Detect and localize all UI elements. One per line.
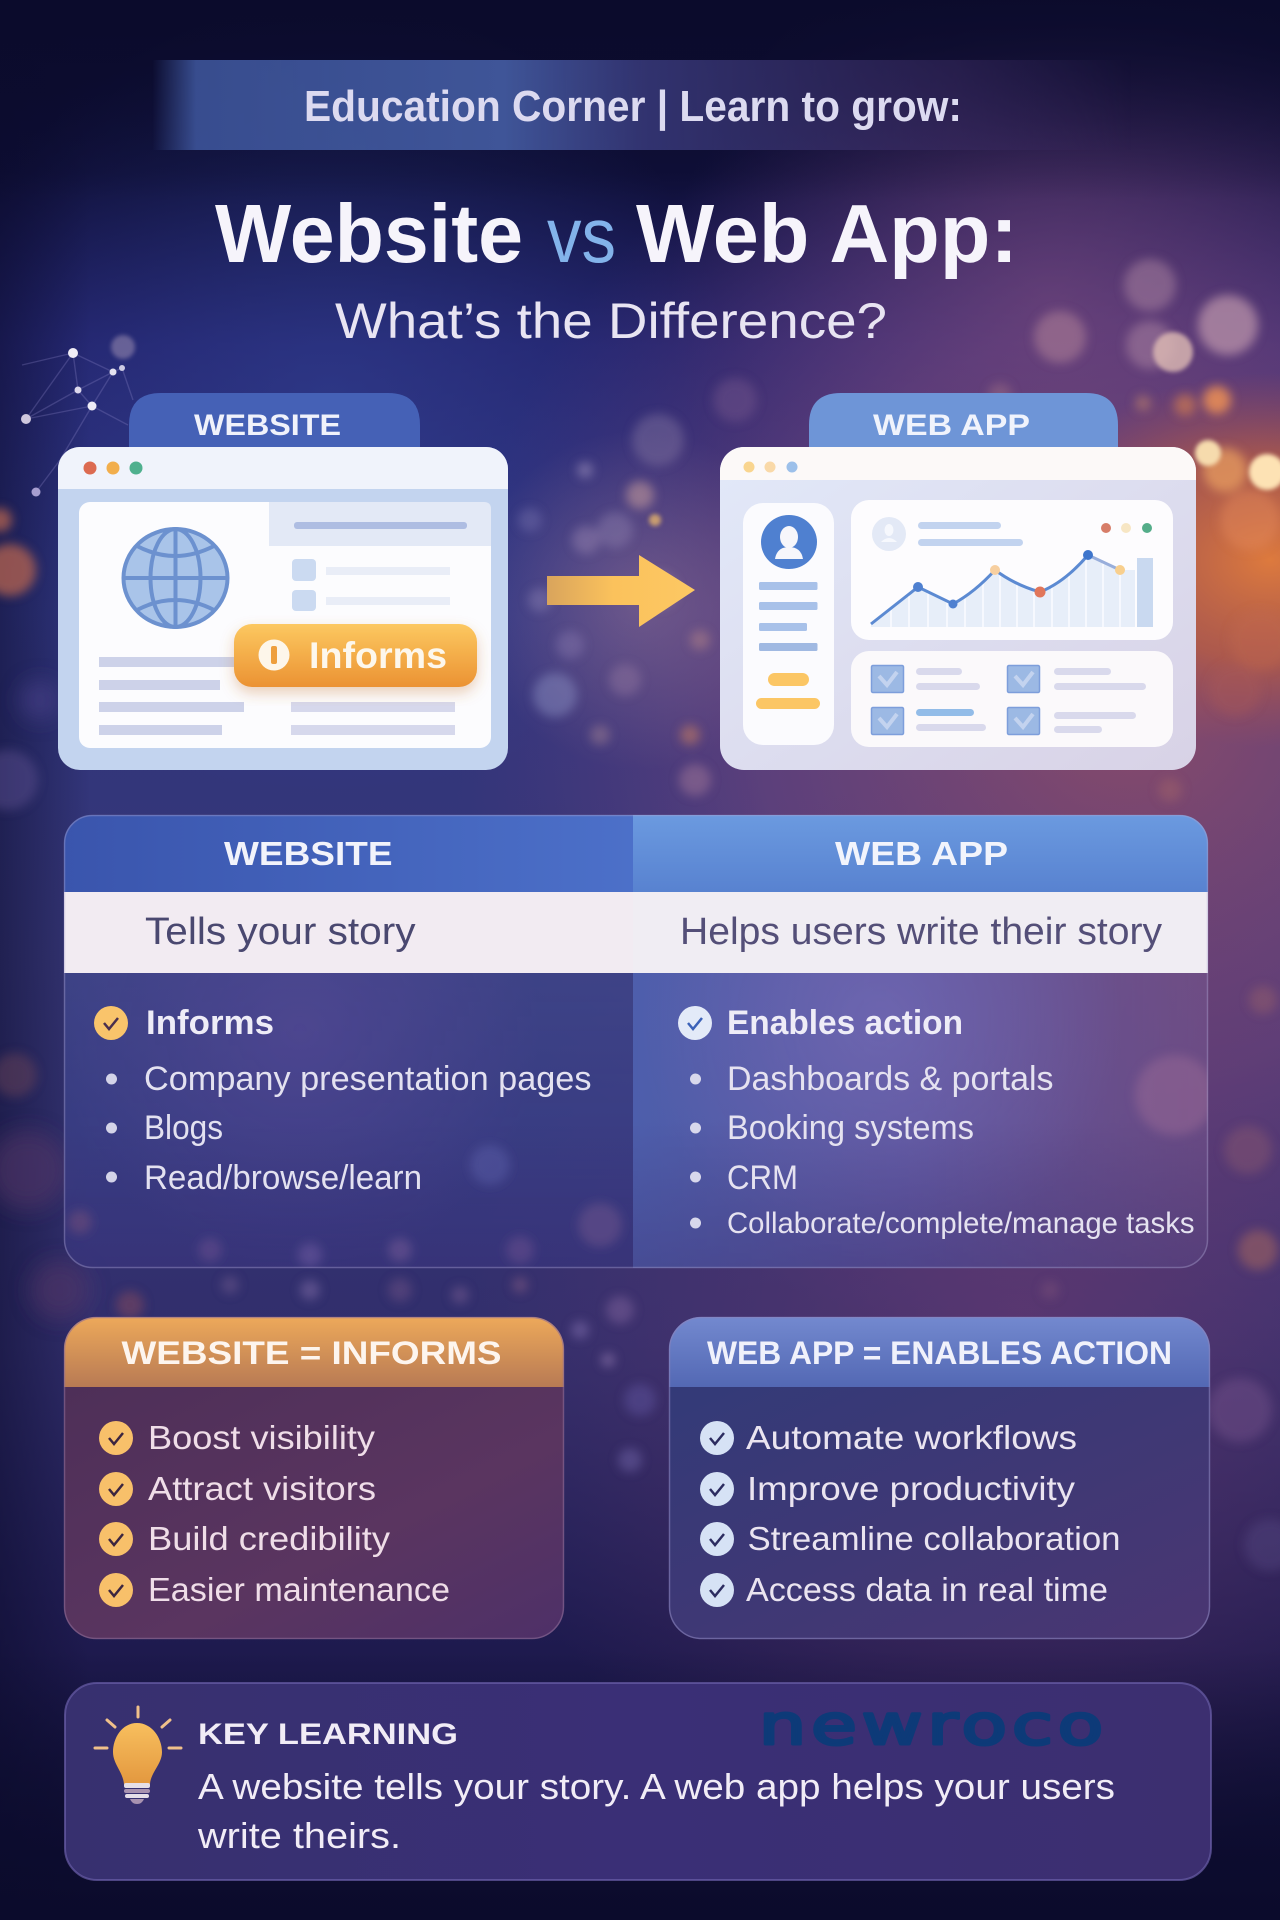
task list panel: [851, 651, 1173, 747]
key learning panel: [65, 1683, 1211, 1880]
icon: light bulb: [95, 1707, 181, 1804]
title: Web App:: [636, 187, 1018, 280]
benefit: attract visitors: Attract visitors: [148, 1470, 376, 1507]
list item: Booking systems: [727, 1109, 974, 1147]
list item: Collaborate/complete/manage tasks: [727, 1207, 1194, 1240]
header band: Education Corner | Learn to grow:: [304, 82, 962, 132]
list item: [106, 1109, 223, 1147]
web app column list: [678, 1004, 1194, 1240]
benefit: streamline collaboration: Streamline collaboration: [748, 1520, 1120, 1557]
badge: informs: Informs: [309, 635, 447, 676]
tab: website: WEBSITE: [194, 409, 341, 442]
benefit: boost visibility: Boost visibility: [148, 1419, 376, 1456]
column header: website: WEBSITE: [224, 835, 392, 872]
web app dashboard window illustration: [720, 447, 1196, 770]
benefit: easier maintenance: Easier maintenance: [148, 1571, 450, 1608]
benefit: improve productivity: Improve productivity: [747, 1470, 1076, 1507]
website column list: [94, 1004, 592, 1197]
list heading: informs: [94, 1004, 274, 1042]
tab: website: [129, 393, 420, 447]
title: vs: [547, 191, 616, 279]
title: Website: [215, 187, 523, 280]
website browser window illustration: [58, 447, 508, 770]
tagline: web app: Helps users write their story: [680, 911, 1162, 953]
badge: informs: [234, 624, 477, 687]
decorative network constellation: [21, 335, 135, 496]
benefit: build credibility: Build credibility: [148, 1520, 391, 1557]
list heading: informs: Informs: [146, 1004, 274, 1042]
tagline: web app: [633, 892, 1208, 973]
header band: [152, 60, 1132, 150]
benefit: automate workflows: Automate workflows: [746, 1419, 1077, 1456]
panel heading: WEBSITE = INFORMS: [122, 1335, 502, 1371]
list item: CRM: [727, 1159, 798, 1197]
icon: globe: [124, 529, 228, 627]
logo: newroco: newroco: [759, 1693, 1103, 1757]
line chart panel: [851, 500, 1173, 640]
tab: web app: WEB APP: [873, 409, 1030, 442]
title: [215, 187, 1018, 280]
list item: Dashboards & portals: [727, 1060, 1054, 1098]
key learning message: [197, 1766, 1115, 1856]
column header: web app: [633, 815, 1208, 892]
tagline: website: [64, 892, 633, 973]
subtitle: What’s the Difference?: [335, 293, 887, 349]
comparison table panel: [64, 815, 1215, 1268]
key learning message: A website tells your story. A web app helps your users: [198, 1766, 1115, 1807]
list item: Company presentation pages: [144, 1060, 592, 1098]
list item: [690, 1159, 798, 1197]
tagline: website: Tells your story: [145, 911, 416, 953]
tab: web app: [809, 393, 1118, 447]
summary panel: website = informs: [64, 1317, 564, 1639]
column header: website: [64, 815, 633, 892]
panel heading: WEB APP = ENABLES ACTION: [707, 1335, 1172, 1371]
sidebar: [743, 503, 834, 745]
heading: key learning: KEY LEARNING: [198, 1718, 458, 1751]
column header: web app: WEB APP: [835, 835, 1008, 872]
key learning message: write theirs.: [197, 1815, 401, 1856]
column body: website: [64, 973, 633, 1268]
summary panel: web app = enables action: [669, 1317, 1210, 1639]
arrow: [547, 555, 695, 627]
list item: Blogs: [144, 1109, 223, 1147]
list heading: enables action: Enables action: [727, 1004, 963, 1042]
column body: web app: [633, 973, 1215, 1268]
list item: Read/browse/learn: [144, 1159, 422, 1197]
benefit: access data in real time: Access data in real time: [746, 1571, 1108, 1608]
